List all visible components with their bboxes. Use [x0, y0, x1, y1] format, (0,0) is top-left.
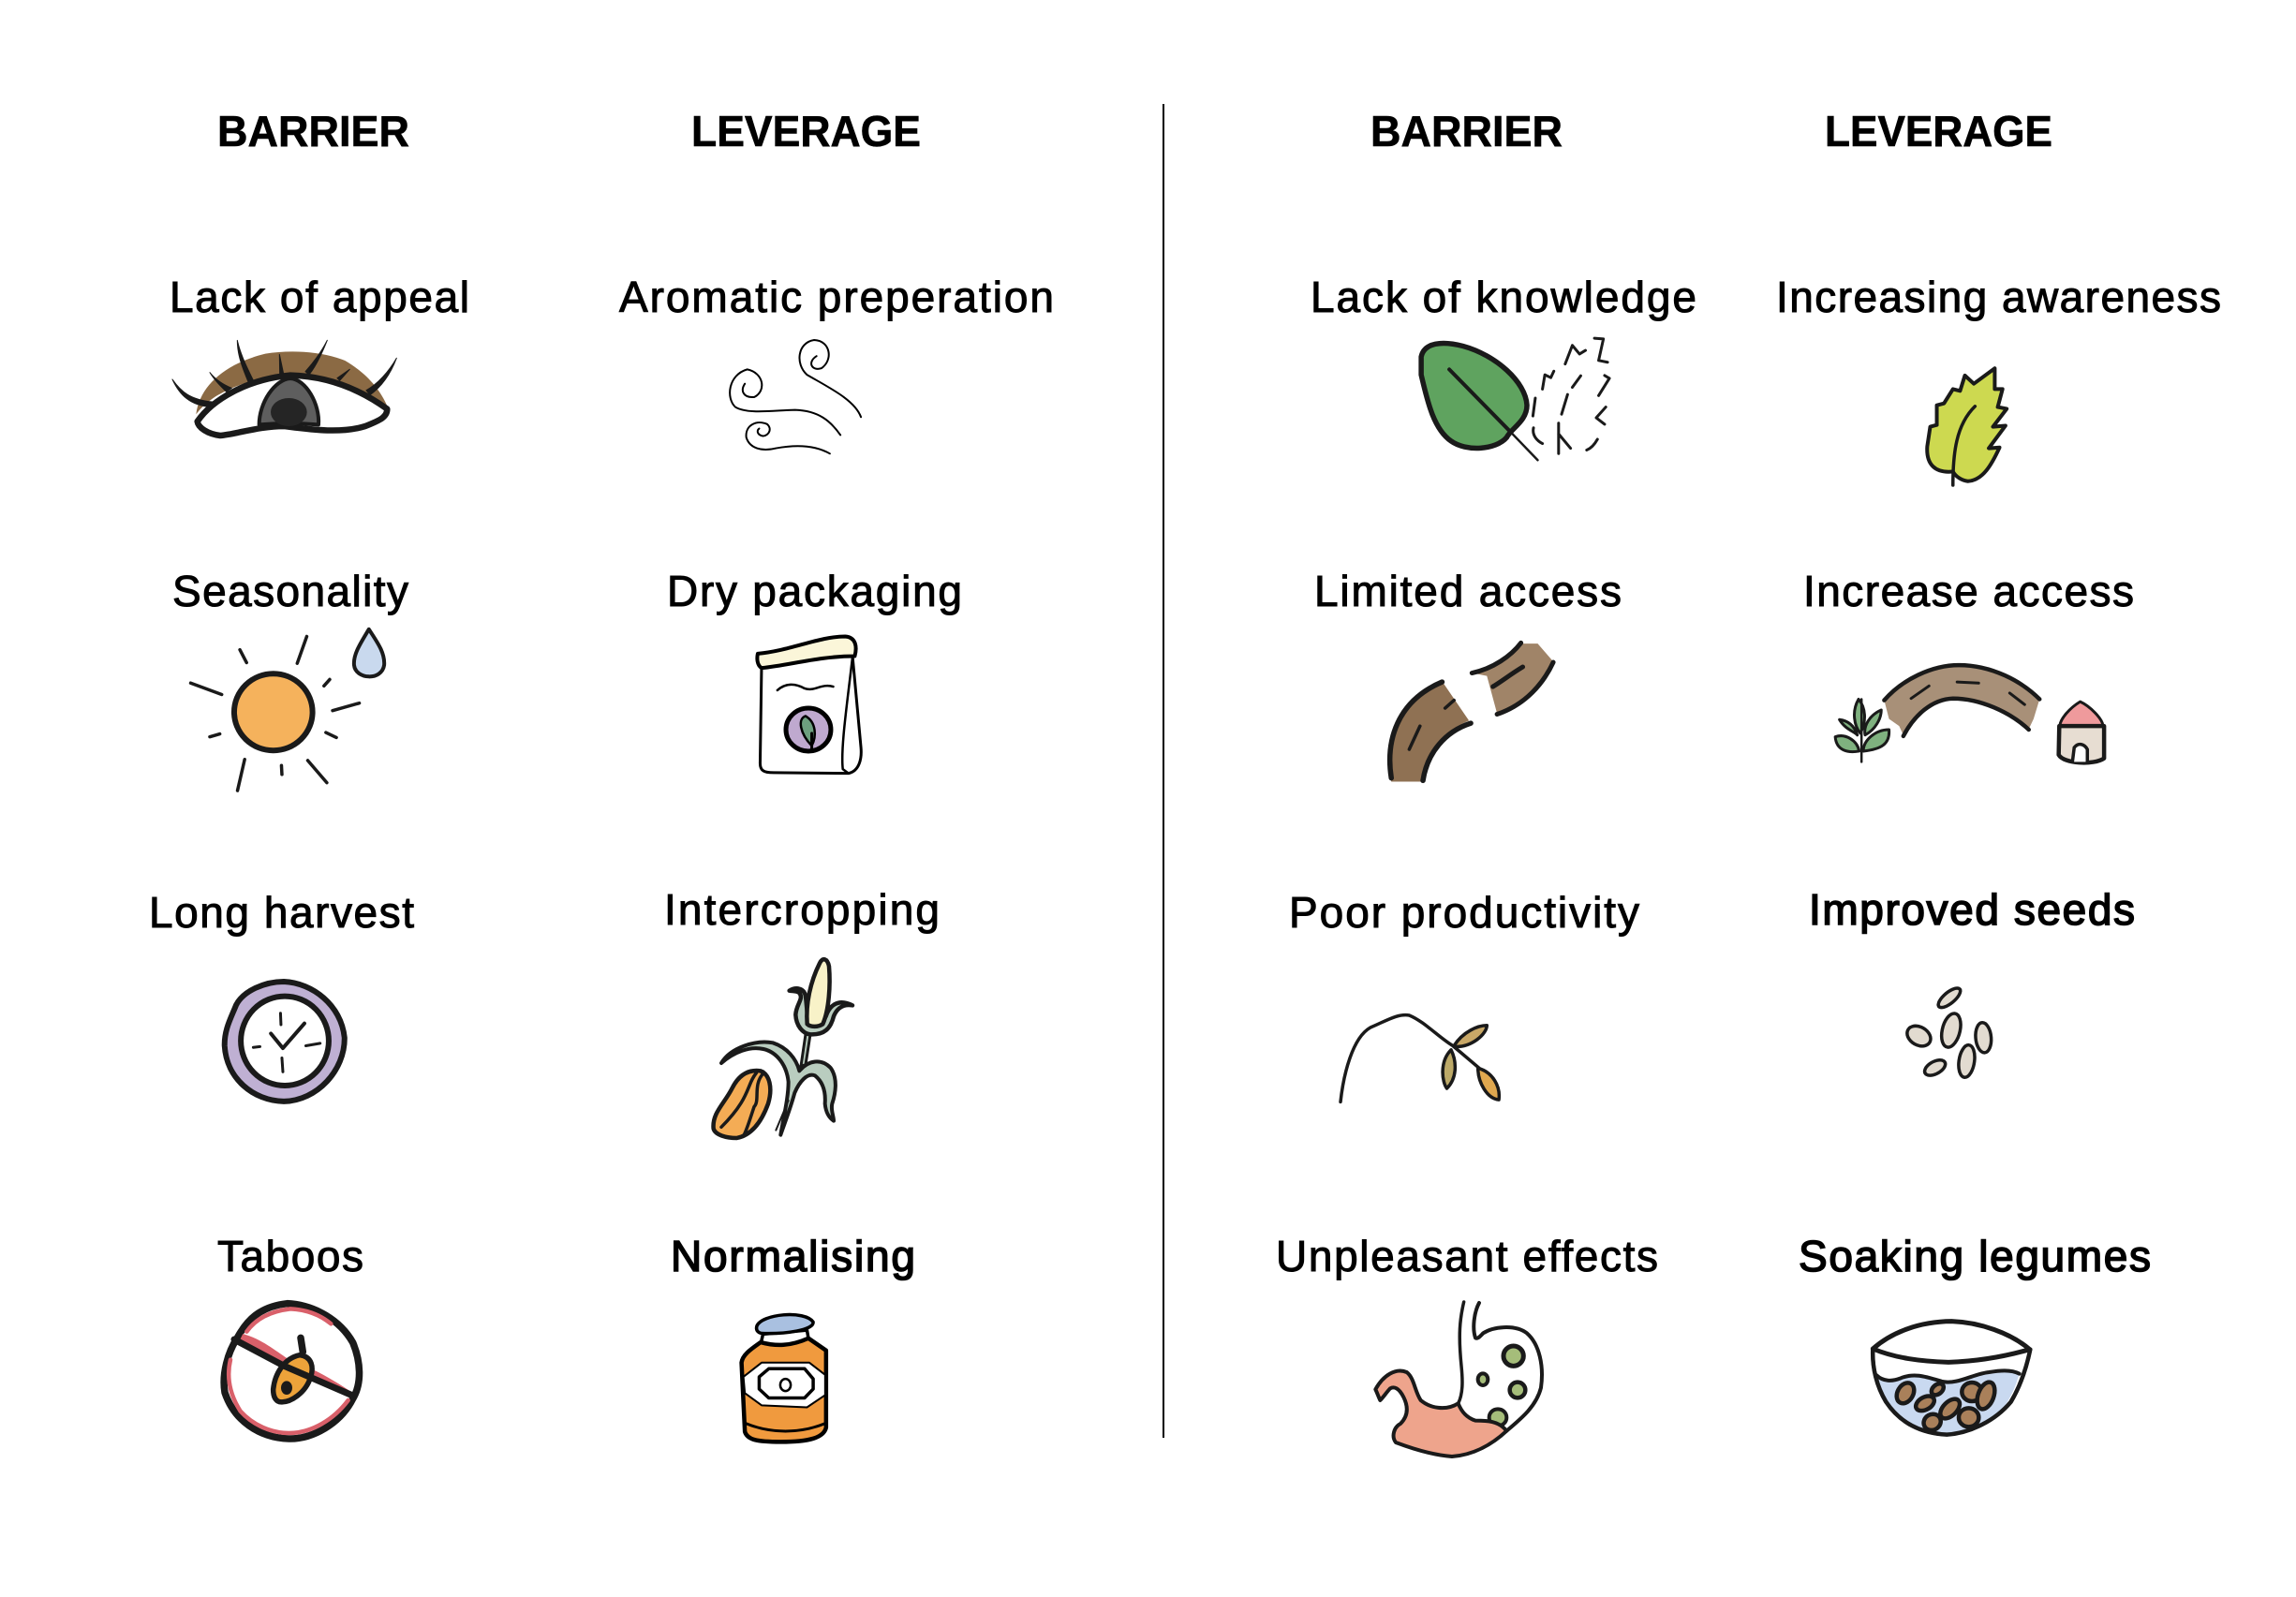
label: poor productivity: Poor productivity: [1289, 888, 1639, 937]
icon: green leaf and dashed leaf: [1421, 338, 1609, 460]
label: aromatic preperation: Aromatic preperation: [619, 273, 1054, 321]
icon: eye: [172, 340, 396, 436]
icon: yellow-green serrated leaf: [1927, 368, 2007, 485]
centre divider line: [1163, 104, 1164, 1438]
label: lack of appeal: Lack of appeal: [170, 273, 469, 321]
label: lack of knowledge: Lack of knowledge: [1311, 273, 1696, 321]
label: taboos: Taboos: [217, 1232, 363, 1280]
label: normalising: Normalising: [671, 1232, 915, 1280]
icon: clock: [225, 982, 345, 1102]
icon: taboo prohibition sign: [224, 1304, 360, 1439]
label: unpleasant effects: Unpleasant effects: [1276, 1232, 1658, 1280]
icon: dry packaging bag: [757, 636, 861, 774]
heading: leverage right: LEVERAGE: [1825, 107, 2052, 155]
label: increasing awareness: Increasing awareness: [1776, 273, 2221, 321]
heading: barrier right: BARRIER: [1370, 107, 1563, 155]
label: dry packaging: Dry packaging: [667, 567, 962, 615]
label: increase access: Increase access: [1803, 567, 2134, 615]
icon: jar: [742, 1315, 826, 1442]
heading: leverage left: LEVERAGE: [691, 107, 921, 155]
label: seasonality: Seasonality: [172, 567, 408, 615]
label: limited access: Limited access: [1314, 567, 1622, 615]
icon: drooping sprout: [1341, 1015, 1499, 1102]
icon: aromatic swirls: [730, 340, 861, 453]
label: intercropping: Intercropping: [664, 885, 940, 934]
label: soaking legumes: Soaking legumes: [1799, 1232, 2151, 1280]
icon: improved seeds: [1903, 986, 1992, 1078]
icon: arched road with plant and house: [1835, 665, 2104, 762]
icon: intercropped corn and squash: [714, 959, 852, 1138]
icon: bowl of soaking legumes: [1873, 1322, 2030, 1435]
label: improved seeds: Improved seeds: [1809, 885, 2135, 934]
icon: broken road: [1389, 643, 1553, 781]
heading: barrier left: BARRIER: [217, 107, 409, 155]
icon: sun and water drop: [191, 629, 384, 791]
label: long harvest: Long harvest: [149, 888, 414, 937]
icon: stomach: [1375, 1302, 1542, 1457]
